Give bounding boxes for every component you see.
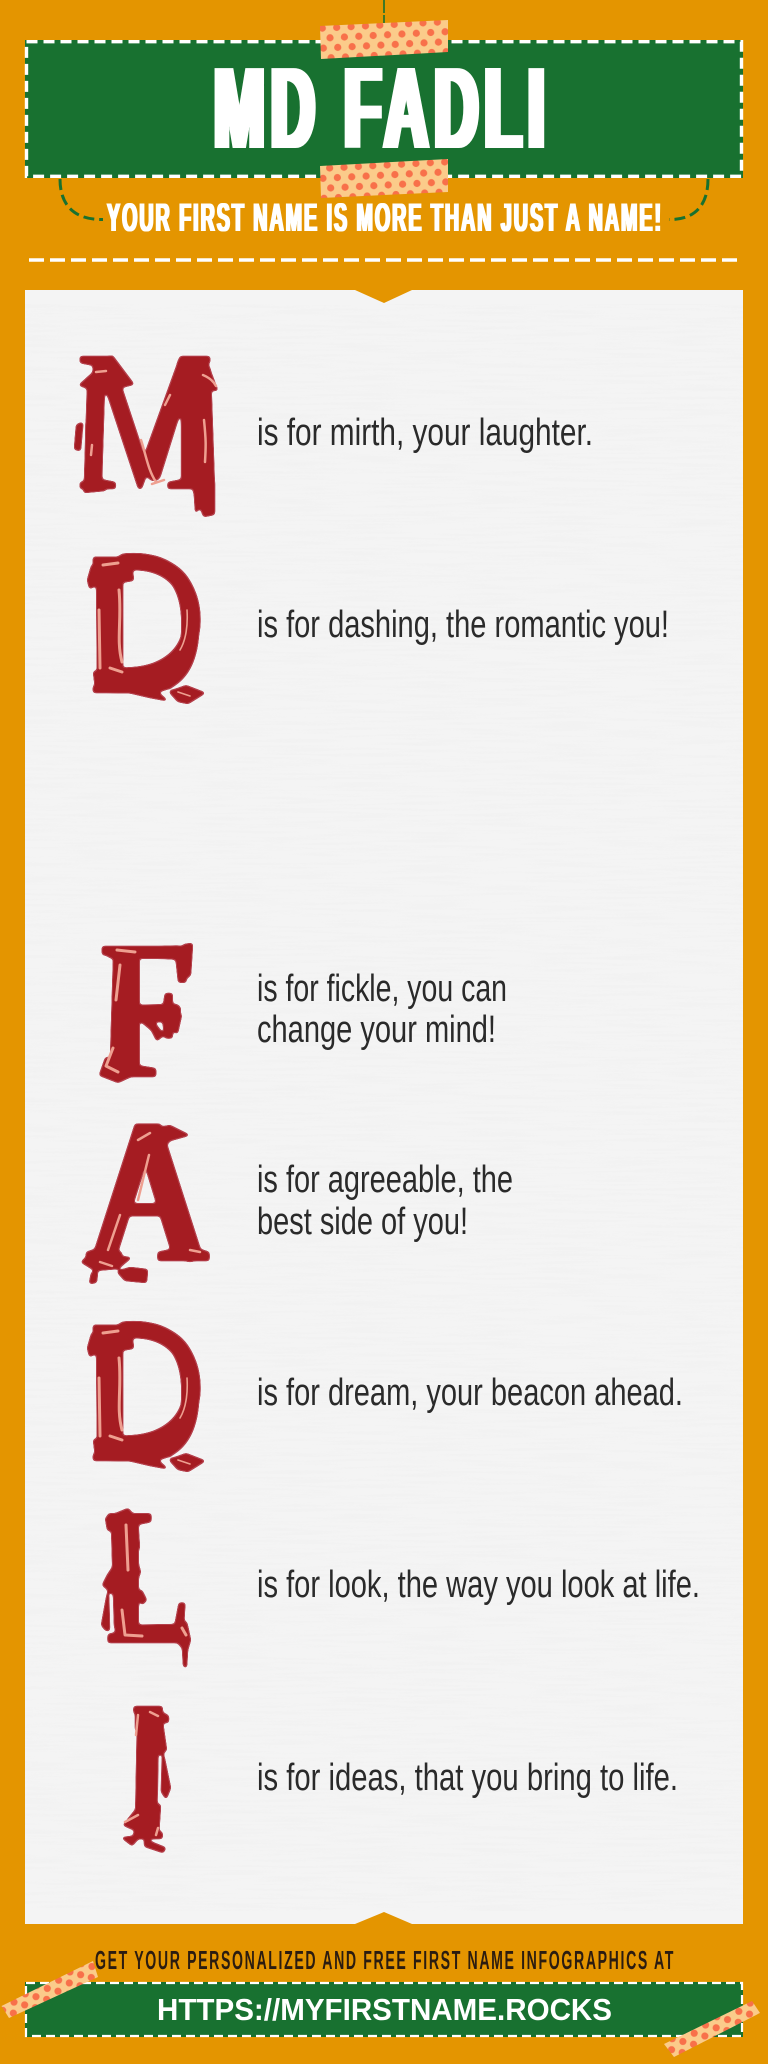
- text: M line: is for mirth, your laughter.: [257, 412, 593, 454]
- text: F lines: [257, 968, 507, 1051]
- tape: footer right: [664, 2001, 760, 2057]
- letter L: L: [106, 1469, 190, 1685]
- letter A: A: [85, 1078, 210, 1305]
- top hanging line: [383, 0, 385, 24]
- letter D: D: [89, 510, 205, 737]
- letter L: [102, 1469, 190, 1685]
- panel: letters: [25, 290, 743, 1924]
- tape: top: [320, 20, 448, 59]
- text: A lines: is for agreeable, the: [257, 1159, 513, 1201]
- text: F lines: is for fickle, you can: [257, 968, 507, 1010]
- text: A lines: best side of you!: [257, 1201, 468, 1243]
- footer url: HTTPS://MYFIRSTNAME.ROCKS: [157, 1992, 612, 2027]
- letter M: M: [76, 311, 214, 532]
- connector: left: [60, 179, 103, 220]
- header banner: [25, 20, 743, 198]
- tape: bottom: [320, 159, 448, 198]
- dashed divider: [29, 258, 738, 262]
- text: F lines: change your mind!: [257, 1009, 496, 1051]
- text: A lines: [257, 1159, 513, 1243]
- letter I: [123, 1661, 170, 1882]
- tape: footer left: [2, 1961, 98, 2018]
- letter F: F: [100, 900, 193, 1119]
- letter D (second): D: [89, 1278, 205, 1505]
- connector: right: [669, 179, 708, 220]
- letter I: I: [130, 1661, 166, 1882]
- footer banner: [25, 1982, 743, 2037]
